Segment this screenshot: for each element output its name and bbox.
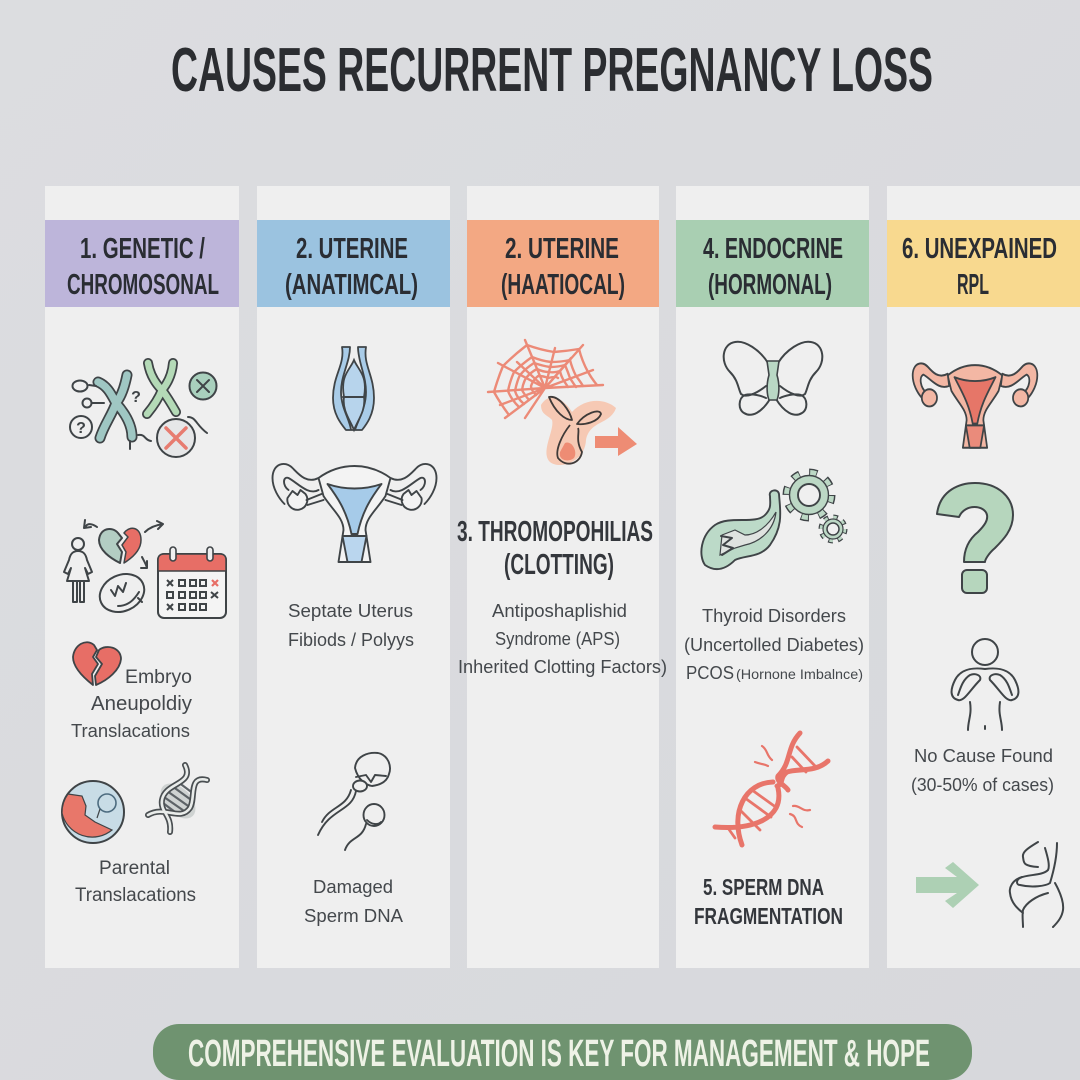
text: damaged sperm dna: Damaged: [313, 877, 393, 897]
heading: genetic: [67, 233, 219, 301]
text: no cause found: No Cause Found: [914, 746, 1053, 766]
text: septate uterus fibroids: Fibiods / Polyys: [288, 630, 414, 650]
icon: green arrow: [916, 862, 979, 908]
icon: dna grey: [148, 765, 207, 832]
heading: endocrine: 4. ENDOCRINE: [703, 233, 843, 265]
icon: woman, broken heart, embryo and calendar: [64, 520, 226, 619]
heading: thrombophilias: [457, 516, 653, 581]
icon: dna red: [715, 733, 828, 845]
text: parental translocations: [75, 858, 196, 906]
heading: uterine: 2. UTERINE: [296, 233, 408, 265]
text: thyroid disorders diabetes pcos: PCOS: [686, 663, 734, 683]
panel: uterine / thrombophilias: [457, 186, 667, 968]
text: thyroid disorders diabetes pcos: (Uncertolled Diabetes): [684, 635, 864, 655]
heading: unexplained: RPL: [957, 269, 989, 301]
heading: genetic: 1. GENETIC /: [80, 233, 205, 265]
icon: broken heart: [73, 642, 121, 685]
heading: sperm dna fragmentation: 5. SPERM DNA: [703, 874, 824, 900]
heading: uterine haatiocal: (HAATIOCAL): [501, 269, 625, 301]
icon: uterus salmon: [913, 363, 1037, 448]
icon: sperm: [318, 753, 390, 850]
icon: thyroid butterfly: [724, 342, 822, 415]
text: thyroid disorders diabetes pcos: Thyroid Disorders: [702, 606, 846, 626]
text: antiphospholipid syndrome: Antiposhaplishid: [492, 601, 627, 621]
heading: uterine haatiocal: 2. UTERINE: [505, 233, 619, 265]
text: parental translocations: Parental: [99, 858, 170, 879]
panel: uterine anatomical: [257, 186, 450, 968]
panel: endocrine hormonal: [676, 186, 869, 968]
heading: unexplained: [902, 233, 1057, 301]
icon: uterus blue: [272, 464, 436, 562]
icon: chromosomes: ?: [131, 389, 141, 406]
text: embryo aneuploidy: Aneupoldiy: [91, 693, 192, 715]
heading: endocrine: (HORMONAL): [708, 269, 832, 301]
footer banner: [153, 1024, 972, 1080]
panel: unexplained rpl: [887, 186, 1080, 968]
heading: thrombophilias: (CLOTTING): [504, 549, 614, 581]
heading: endocrine: [703, 233, 843, 301]
heading: thrombophilias: 3. THROMOPOHILIAS: [457, 516, 653, 548]
text: damaged sperm dna: Sperm DNA: [304, 906, 403, 926]
text: septate uterus fibroids: Septate Uterus: [288, 601, 413, 621]
text: no cause found: (30-50% of cases): [911, 775, 1054, 795]
heading: uterine: (ANATIMCAL): [285, 269, 418, 301]
heading: sperm dna fragmentation: FRAGMENTATION: [694, 903, 843, 929]
text: antiphospholipid syndrome: [458, 601, 667, 677]
icon: pregnant figure: [1010, 842, 1063, 927]
heading: sperm dna fragmentation: [694, 874, 843, 929]
icon: chromosomes: ?: [76, 420, 86, 437]
icon: septate cervix: [333, 347, 374, 430]
text: no cause found: [911, 746, 1054, 795]
text: damaged sperm dna: [304, 877, 403, 926]
icon: pancreas and gears: [701, 472, 845, 569]
text: thyroid disorders diabetes pcos: (Hornone Imbalnce): [736, 666, 863, 682]
icon: cracked globe: [62, 781, 124, 843]
text: antiphospholipid syndrome: Inherited Clotting Factors): [458, 657, 667, 677]
text: embryo aneuploidy: [71, 666, 192, 741]
icon: chromosomes: [70, 363, 216, 457]
heading: uterine: [285, 233, 418, 301]
icon: question mark: [937, 483, 1013, 593]
text: embryo aneuploidy: Embryo: [125, 666, 192, 688]
heading: genetic: CHROMOSONAL: [67, 269, 219, 301]
text: thyroid disorders diabetes pcos: [684, 606, 864, 683]
icon: person: [952, 639, 1018, 730]
heading: uterine haatiocal: [501, 233, 625, 301]
panel: genetic / chromosomal: [45, 186, 239, 968]
text: parental translocations: Translacations: [75, 885, 196, 906]
text: antiphospholipid syndrome: Syndrome (APS): [495, 629, 620, 649]
text: embryo aneuploidy: Translacations: [71, 721, 190, 741]
text: septate uterus fibroids: [288, 601, 414, 650]
icon: clot web with uterus: [488, 340, 637, 465]
